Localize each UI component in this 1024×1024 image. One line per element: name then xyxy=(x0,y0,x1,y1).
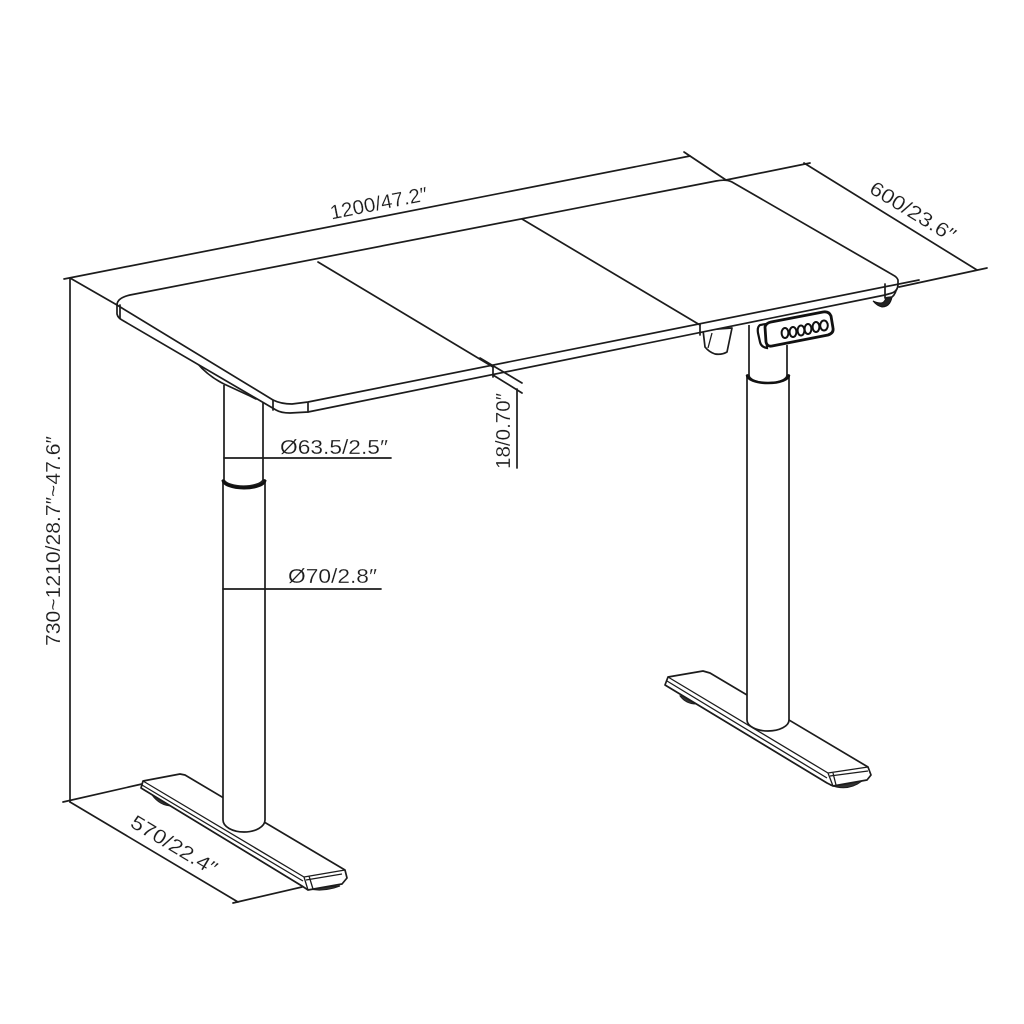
under-desk bracket xyxy=(197,363,256,399)
dimension lines: height and foot length xyxy=(63,278,302,903)
right rear caster xyxy=(873,286,897,307)
desktop front and side edges xyxy=(120,284,885,412)
control panel xyxy=(758,312,833,348)
left leg xyxy=(141,385,347,890)
right leg xyxy=(665,325,871,788)
right upper column xyxy=(749,325,787,383)
label: lower column diameter: Ø70/2.8″ xyxy=(288,566,377,588)
desktop xyxy=(117,180,919,413)
right lower column xyxy=(747,375,789,731)
label: foot length: 570/22.4″ xyxy=(126,811,221,880)
desktop top face edge xyxy=(117,280,919,404)
left collar xyxy=(223,480,265,488)
dimension lines: overall width and depth xyxy=(64,152,987,305)
right collar xyxy=(747,375,789,383)
label: desktop thickness: 18/0.70″ xyxy=(493,393,515,469)
column diameter leader lines xyxy=(223,458,391,589)
label: desktop width: 1200/47.2″ xyxy=(328,184,430,224)
left lower column xyxy=(223,480,265,832)
thickness dimension lines xyxy=(480,358,522,468)
right foot xyxy=(665,671,871,788)
label: height range: 730~1210/28.7″~47.6″ xyxy=(43,436,65,646)
left foot xyxy=(141,774,347,890)
left upper column xyxy=(224,385,263,486)
label: desktop depth: 600/23.6″ xyxy=(865,178,960,247)
panel seams xyxy=(318,219,700,367)
label: upper column diameter: Ø63.5/2.5″ xyxy=(280,437,388,459)
under-desk motor box xyxy=(703,328,732,354)
desktop slab xyxy=(117,180,898,413)
